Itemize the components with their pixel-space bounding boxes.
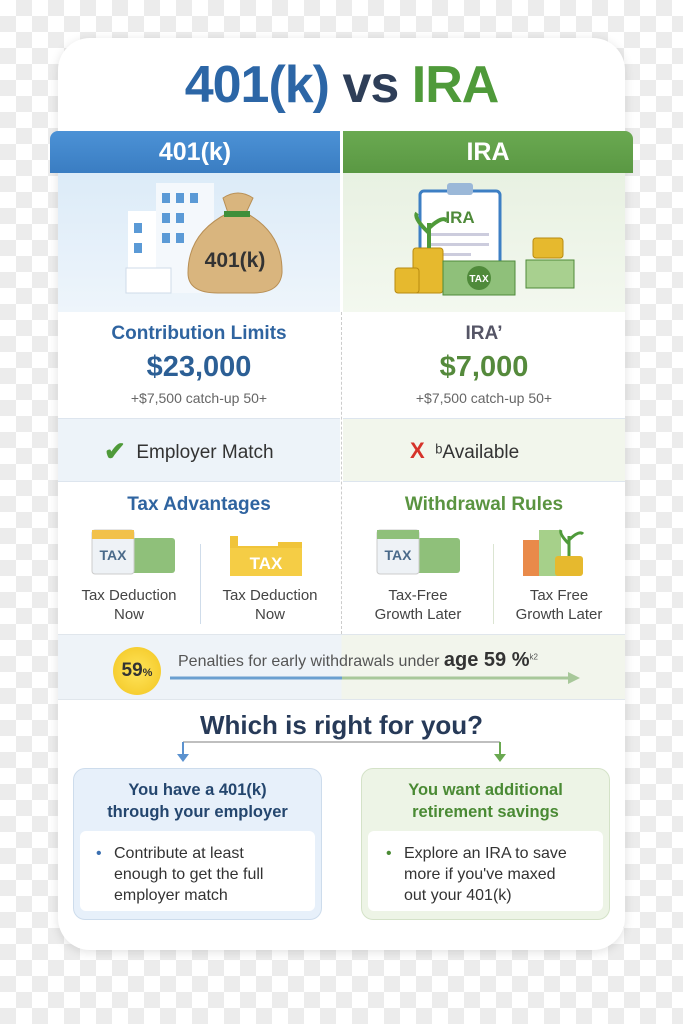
tax advantages: Tax Deduction <box>222 587 318 604</box>
header: 401(k): 401(k) <box>159 138 231 166</box>
contribution limits: 401(k): Contribution Limits <box>111 323 287 344</box>
employer match: 401(k): ✔ Employer Match <box>104 436 274 466</box>
arrow <box>170 672 580 684</box>
contribution limits: IRA: IRA’ <box>466 323 502 344</box>
contribution limits: 401(k) <box>111 323 287 406</box>
box: IRA: • <box>386 845 392 862</box>
employer match: IRA: X ᵇAvailable <box>410 438 519 463</box>
penalty banner: Penalties for early withdrawals under age 59 %k2 <box>178 649 538 671</box>
employer match: IRA <box>343 418 625 482</box>
box: IRA: retirement savings <box>412 803 559 821</box>
icon: 59% coin <box>113 647 161 695</box>
header: IRA: IRA <box>466 138 510 166</box>
contribution limits: IRA: $7,000 <box>440 351 528 383</box>
box: 401(k): You have a 401(k) <box>128 781 267 799</box>
box: IRA <box>361 768 610 920</box>
icon: money bag <box>188 193 282 293</box>
withdrawal rules: Tax-Free <box>388 587 448 604</box>
illustration panel: IRA <box>343 173 625 312</box>
divider <box>341 312 342 634</box>
icon: tax bills <box>443 260 574 295</box>
box: IRA: You want additional <box>408 781 563 799</box>
tax advantages <box>81 494 318 624</box>
header: IRA <box>343 131 633 173</box>
contribution limits: IRA: +$7,500 catch-up 50+ <box>416 390 552 406</box>
withdrawal rules: Withdrawal Rules <box>405 494 563 515</box>
card background <box>58 38 625 950</box>
icon: tax calendar: TAX <box>100 547 127 563</box>
icon: tax folder <box>230 536 302 576</box>
contribution limits: 401(k): +$7,500 catch-up 50+ <box>131 390 267 406</box>
withdrawal rules <box>375 494 602 624</box>
header: 401(k) <box>50 131 340 173</box>
icon: clipboard <box>420 183 500 291</box>
withdrawal rules: Growth Later <box>375 606 461 623</box>
icon: coins and plant <box>523 529 584 576</box>
box: 401(k): Contribute at least enough to get the full employer match <box>114 845 263 904</box>
withdrawal rules: Tax Free <box>530 587 588 604</box>
box: 401(k): • <box>96 845 102 862</box>
box: 401(k): through your employer <box>107 803 288 821</box>
icon: 59% coin: 59% <box>122 660 152 681</box>
contribution limits: IRA <box>416 323 552 406</box>
title: 401(k) vs IRA <box>185 56 498 114</box>
tax advantages: Now <box>114 606 144 623</box>
contribution limits: 401(k): $23,000 <box>147 351 251 383</box>
box: IRA: Explore an IRA to save more if you've maxed out your 401(k) <box>404 845 567 904</box>
icon: tax calendar green: TAX <box>385 547 412 563</box>
penalty banner <box>58 634 625 700</box>
arrows to boxes <box>177 741 506 762</box>
employer match: 401(k) <box>58 418 340 482</box>
tax advantages: Tax Deduction <box>81 587 177 604</box>
withdrawal rules: Growth Later <box>516 606 602 623</box>
icon: tax bills: TAX <box>469 274 489 285</box>
icon: tax folder: TAX <box>250 554 283 573</box>
box: 401(k) <box>73 768 322 920</box>
tax advantages: Tax Advantages <box>127 494 271 515</box>
question heading: Which is right for you? <box>200 710 483 740</box>
illustration panel: 401(k) <box>58 173 340 312</box>
tax advantages: Now <box>255 606 285 623</box>
icon: office building <box>126 183 214 293</box>
icon: coins and plant <box>395 238 563 293</box>
icon: money bag: 401(k) <box>205 249 265 272</box>
icon: tax calendar <box>92 530 175 574</box>
icon: clipboard: IRA <box>445 208 475 227</box>
icon: tax calendar green <box>376 530 460 574</box>
